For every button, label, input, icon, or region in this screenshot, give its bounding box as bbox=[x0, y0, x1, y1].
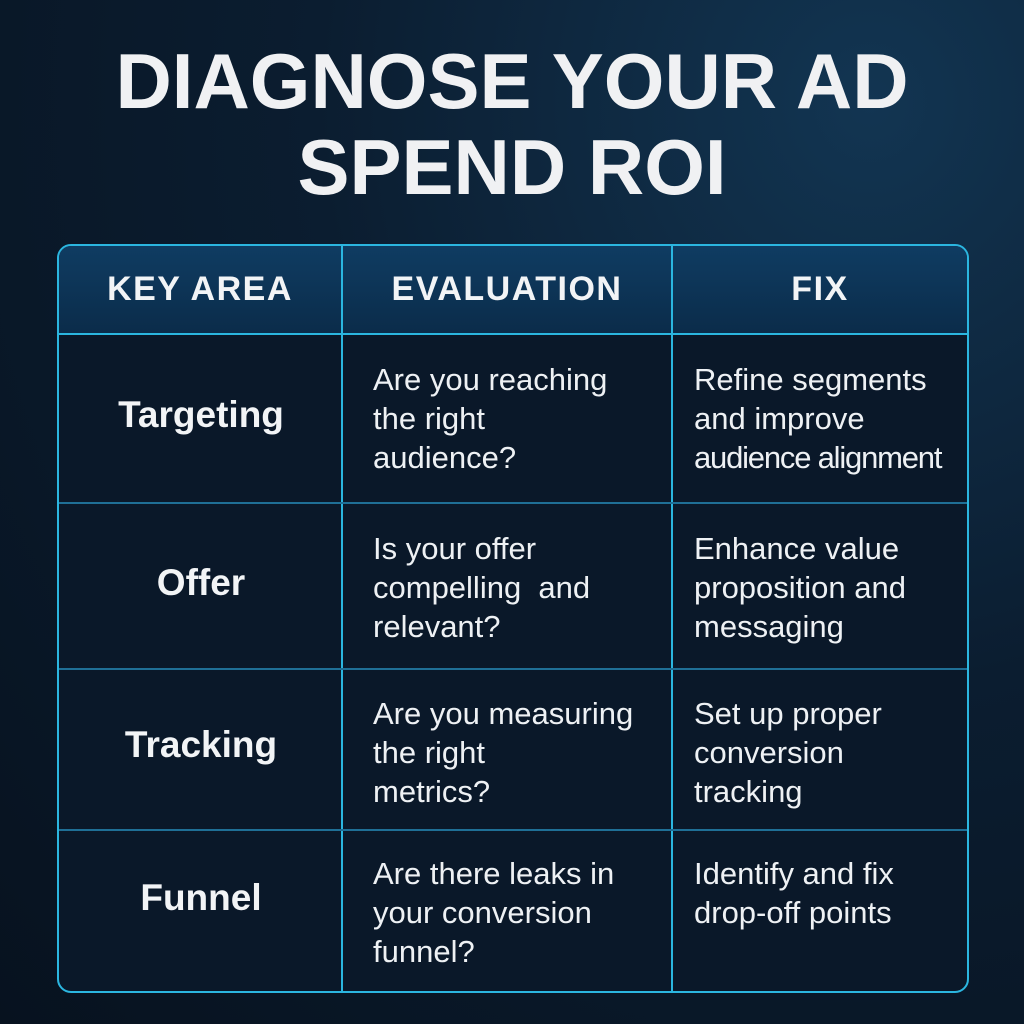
cell: targeting evaluation: audience? bbox=[373, 440, 516, 475]
cell: tracking evaluation: metrics? bbox=[373, 774, 490, 809]
cell: offer fix bbox=[694, 531, 906, 644]
title: SPEND ROI bbox=[297, 123, 727, 211]
cell: tracking fix: conversion bbox=[694, 735, 844, 770]
cell: funnel evaluation: funnel? bbox=[373, 934, 475, 969]
cell: funnel fix: Identify and fix bbox=[694, 856, 894, 891]
cell: tracking evaluation: Are you measuring bbox=[373, 696, 633, 731]
cell: targeting fix: audience alignment bbox=[694, 440, 941, 475]
cell: targeting evaluation: Are you reaching bbox=[373, 362, 607, 397]
cell: targeting fix: and improve bbox=[694, 401, 865, 436]
title: DIAGNOSE YOUR AD bbox=[115, 37, 909, 125]
title bbox=[115, 37, 909, 211]
cell: funnel fix: drop-off points bbox=[694, 895, 892, 930]
cell: tracking fix bbox=[694, 696, 882, 809]
cell: funnel evaluation: Are there leaks in bbox=[373, 856, 614, 891]
cell: funnel evaluation bbox=[373, 856, 614, 969]
table bbox=[57, 244, 969, 993]
cell: tracking fix: Set up proper bbox=[694, 696, 882, 731]
row: tracking: Tracking bbox=[125, 724, 277, 765]
cell: tracking evaluation bbox=[373, 696, 633, 809]
cell: targeting evaluation bbox=[373, 362, 607, 475]
header: evaluation: EVALUATION bbox=[392, 270, 622, 308]
cell: targeting evaluation: the right bbox=[373, 401, 485, 436]
row: funnel: Funnel bbox=[140, 877, 262, 918]
cell: funnel fix bbox=[694, 856, 894, 930]
row: offer: Offer bbox=[157, 562, 245, 603]
cell: offer fix: proposition and bbox=[694, 570, 906, 605]
row: targeting: Targeting bbox=[118, 394, 284, 435]
cell: targeting fix: Refine segments bbox=[694, 362, 927, 397]
cell: targeting fix bbox=[694, 362, 942, 475]
cell: offer evaluation bbox=[373, 531, 590, 644]
header: fix: FIX bbox=[791, 270, 849, 308]
cell: tracking evaluation: the right bbox=[373, 735, 485, 770]
cell: offer fix: messaging bbox=[694, 609, 844, 644]
cell: funnel evaluation: your conversion bbox=[373, 895, 592, 930]
cell: offer evaluation: Is your offer bbox=[373, 531, 536, 566]
cell: offer evaluation: relevant? bbox=[373, 609, 501, 644]
cell: offer fix: Enhance value bbox=[694, 531, 899, 566]
cell: tracking fix: tracking bbox=[694, 774, 803, 809]
header: key area: KEY AREA bbox=[107, 270, 293, 308]
cell: offer evaluation: compelling and bbox=[373, 570, 590, 605]
